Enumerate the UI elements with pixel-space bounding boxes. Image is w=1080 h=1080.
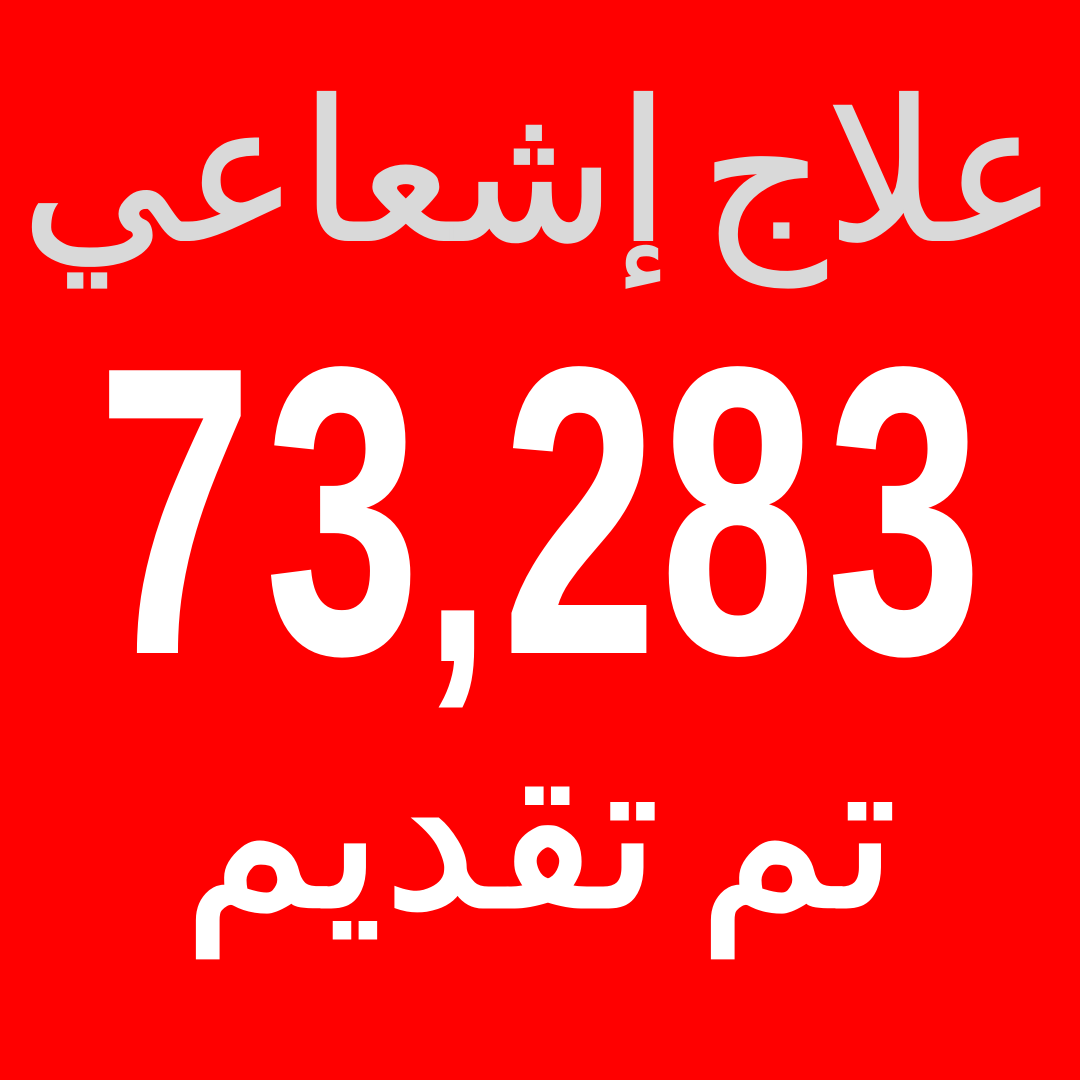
big number: , <box>429 388 486 722</box>
big number: 283 <box>503 282 982 739</box>
title: radiotherapy: علاج إشعاعي <box>20 59 1059 288</box>
caption: delivered: تم تقديم <box>183 710 898 958</box>
big number: 73 <box>98 282 420 739</box>
